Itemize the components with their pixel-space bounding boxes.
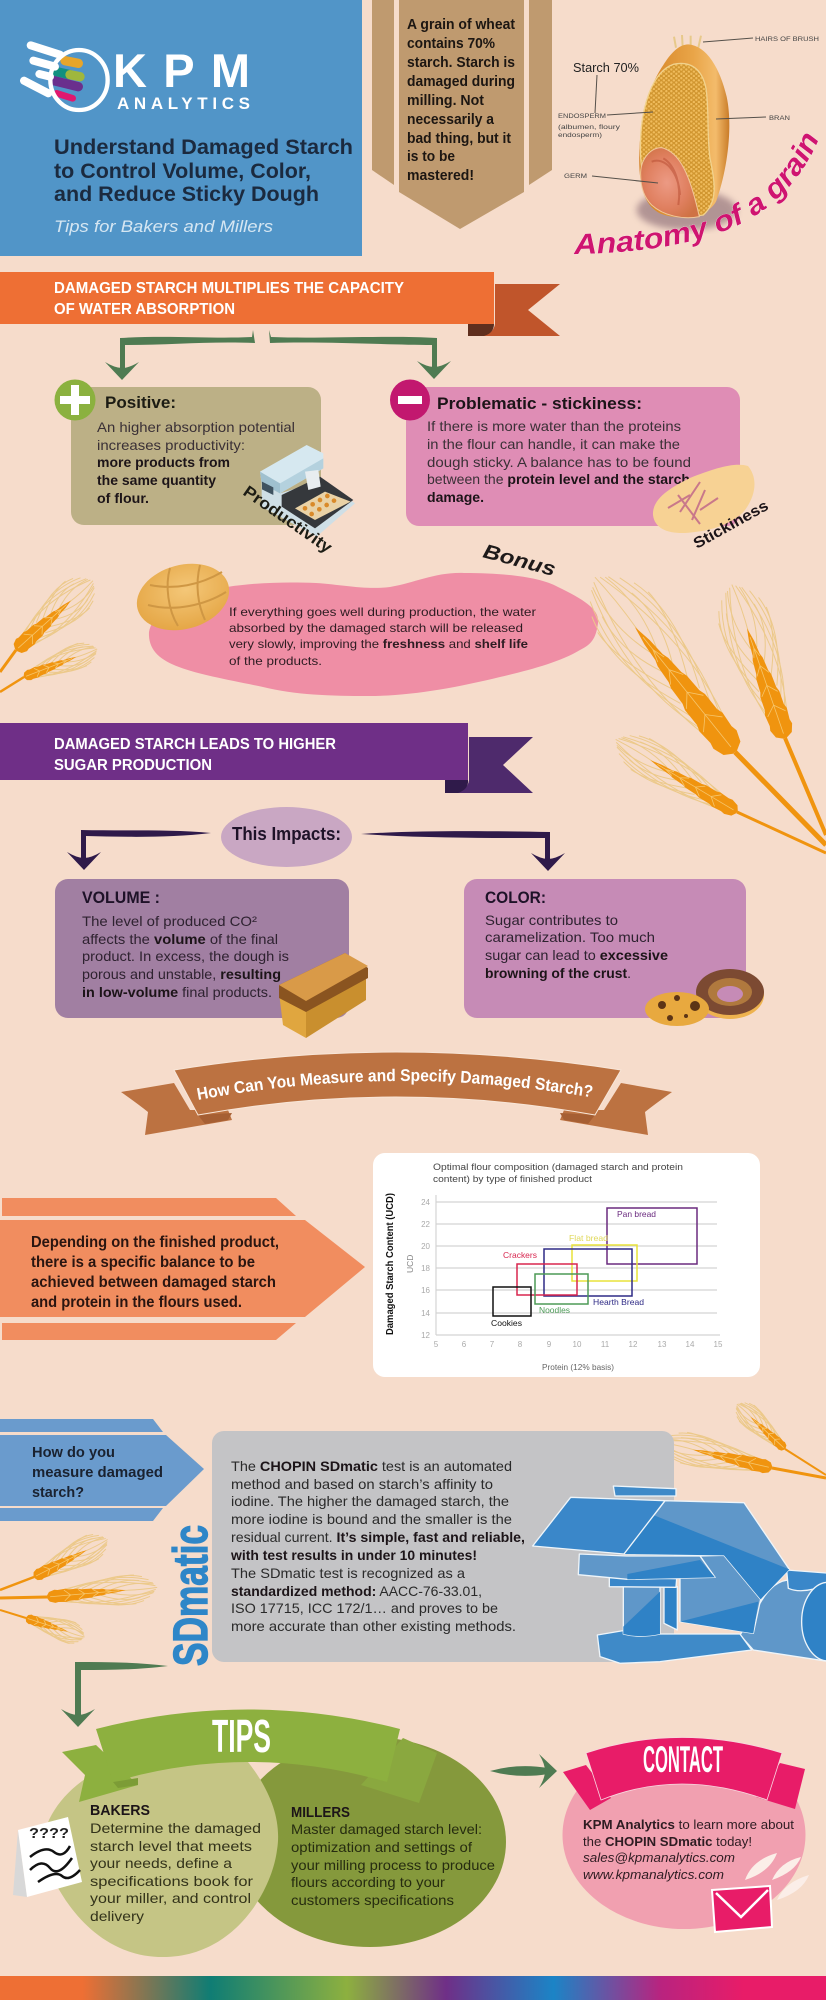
subtitle: Tips for Bakers and Millers bbox=[54, 218, 273, 236]
ribbon text: How Can You Measure and Specify Damaged Starch? bbox=[196, 1068, 592, 1100]
panel: volume bbox=[55, 879, 349, 1018]
arrow panel: specific balance bbox=[0, 1198, 365, 1340]
wheat: top right of SDmatic bbox=[658, 1396, 826, 1483]
title: and Reduce Sticky Dough bbox=[54, 183, 319, 206]
millers text: Master damaged starch level: bbox=[291, 1821, 482, 1837]
panel: SDmatic description: residual current. It’s simple, fast and reliable, bbox=[231, 1529, 525, 1545]
bakers text: starch level that meets bbox=[90, 1838, 252, 1854]
axis labels: Protein (12% basis) bbox=[542, 1362, 614, 1372]
grain labels: (albumen, floury bbox=[558, 124, 621, 131]
y axis ticks: 14 bbox=[421, 1309, 431, 1318]
contact text: sales@kpmanalytics.com bbox=[583, 1850, 735, 1865]
section banner: sugar production: SUGAR PRODUCTION bbox=[54, 757, 212, 774]
caption: anatomy of a grain: Anatomy of a grain bbox=[573, 133, 818, 254]
positive body text: An higher absorption potential bbox=[97, 419, 295, 435]
positive body text: the same quantity bbox=[97, 472, 216, 488]
problematic body text: in the flour can handle, it can make the bbox=[427, 436, 680, 452]
label: SDmatic vertical: SDmatic bbox=[165, 1525, 218, 1666]
wheat: left of SDmatic bbox=[0, 1528, 158, 1647]
volume body text: affects the volume of the final bbox=[82, 931, 278, 947]
positive body text bbox=[97, 419, 295, 506]
x axis ticks: 14 bbox=[686, 1340, 695, 1349]
bakers text bbox=[90, 1802, 261, 1924]
panel: SDmatic description: The CHOPIN SDmatic test is an automated bbox=[231, 1458, 512, 1474]
problematic body text: If there is more water than the proteins bbox=[427, 418, 681, 434]
ribbon: tips: TIPS bbox=[212, 1710, 271, 1762]
x axis ticks: 13 bbox=[658, 1340, 667, 1349]
bakers text: BAKERS bbox=[90, 1802, 150, 1819]
problematic body text: dough sticky. A balance has to be found bbox=[427, 454, 691, 470]
x axis ticks: 12 bbox=[629, 1340, 638, 1349]
icon: donut and cookie bbox=[645, 969, 764, 1026]
chart title bbox=[433, 1162, 683, 1184]
millers text bbox=[291, 1804, 495, 1908]
panel: contact bbox=[562, 1738, 809, 1932]
bonus text: If everything goes well during production, the water bbox=[229, 605, 536, 619]
diagram: anatomy of a grain bbox=[558, 35, 819, 254]
section banner: sugar production: DAMAGED STARCH LEADS TO HIGHER bbox=[54, 736, 336, 753]
panel: color: COLOR: bbox=[485, 889, 546, 907]
hanging ribbon: grain fact: milling. Not bbox=[407, 93, 484, 109]
bonus text: very slowly, improving the freshness and shelf life bbox=[229, 637, 528, 651]
hanging ribbon: grain fact: bad thing, but it bbox=[407, 131, 511, 147]
arrow: tips to contact bbox=[490, 1754, 557, 1788]
chart: flour composition bbox=[373, 1153, 760, 1377]
chart labels: Crackers bbox=[503, 1250, 537, 1260]
logo: KPM Analytics: ANALYTICS bbox=[117, 94, 250, 113]
hanging ribbon: grain fact: is to be bbox=[407, 149, 455, 165]
panel: tips bbox=[13, 1710, 506, 1957]
x axis ticks: 5 bbox=[434, 1340, 439, 1349]
callout: this impacts: This Impacts: bbox=[232, 824, 341, 844]
shape: bakers egg bbox=[43, 1757, 278, 1957]
arrow panel: how do you measure: starch? bbox=[32, 1484, 84, 1501]
chart title: Optimal flour composition (damaged starch and protein bbox=[433, 1162, 683, 1172]
icon: sticky dough bbox=[653, 465, 754, 533]
chart ranges bbox=[493, 1208, 697, 1316]
volume body text: in low-volume final products. bbox=[82, 984, 272, 1000]
x axis ticks: 9 bbox=[547, 1340, 552, 1349]
panel: problematic stickiness bbox=[390, 380, 740, 526]
hanging ribbon: grain fact: contains 70% bbox=[407, 36, 495, 52]
section banner: water absorption bbox=[0, 272, 560, 336]
rainbow footer bar bbox=[0, 1976, 826, 2000]
arrow panel: specific balance: Depending on the finished product, bbox=[31, 1234, 279, 1251]
x axis ticks bbox=[434, 1340, 723, 1349]
positive body text: increases productivity: bbox=[97, 437, 245, 453]
ribbon heading: how can you measure bbox=[121, 1052, 672, 1135]
y axis ticks: 18 bbox=[421, 1264, 431, 1273]
panel: problematic stickiness: Problematic - stickiness: bbox=[437, 394, 642, 413]
chart labels: Pan bread bbox=[617, 1209, 656, 1219]
grain labels: GERM bbox=[564, 173, 587, 180]
panel: SDmatic description: more accurate than other existing methods. bbox=[231, 1618, 516, 1634]
problematic body text bbox=[427, 418, 691, 505]
positive body text: more products from bbox=[97, 454, 230, 470]
axis labels: UCD bbox=[405, 1255, 415, 1273]
panel: SDmatic description: with test results in under 10 minutes! bbox=[230, 1547, 477, 1563]
bakers text: your miller, and control bbox=[90, 1890, 251, 1906]
arrow: to tips bbox=[61, 1662, 168, 1727]
y axis ticks: 16 bbox=[421, 1286, 431, 1295]
panel: SDmatic description: iodine. The higher the damaged starch, the bbox=[231, 1493, 509, 1509]
panel: volume: VOLUME : bbox=[82, 889, 160, 907]
panel: bonus bbox=[129, 541, 598, 696]
y axis ticks: 24 bbox=[421, 1198, 431, 1207]
millers text: customers specifications bbox=[291, 1892, 454, 1908]
panel: SDmatic description: more iodine is bound and the smaller is the bbox=[231, 1511, 512, 1527]
title: Understand Damaged Starch bbox=[54, 136, 353, 159]
section banner: sugar production bbox=[0, 723, 533, 793]
grain illustration bbox=[637, 35, 737, 230]
problematic body text: damage. bbox=[427, 489, 484, 505]
icon: note with question marks bbox=[13, 1817, 82, 1897]
millers text: optimization and settings of bbox=[291, 1839, 472, 1855]
panel: SDmatic description: method and based on starch’s affinity to bbox=[231, 1476, 493, 1492]
chart labels bbox=[491, 1209, 656, 1328]
arrow panel: specific balance: there is a specific balance to be bbox=[31, 1254, 255, 1271]
y axis ticks: 22 bbox=[421, 1220, 431, 1229]
panel: SDmatic description: standardized method: AACC-76-33.01, bbox=[231, 1583, 482, 1599]
icon: loaf of bread bbox=[279, 953, 368, 1038]
chart title: content) by type of finished product bbox=[433, 1174, 593, 1184]
title: to Control Volume, Color, bbox=[54, 160, 311, 183]
hanging ribbon: grain fact: starch. Starch is bbox=[407, 55, 515, 71]
panel: positive: Positive: bbox=[105, 394, 176, 412]
title bbox=[54, 136, 353, 206]
section banner: water absorption: OF WATER ABSORPTION bbox=[54, 301, 235, 318]
logo: KPM Analytics: KPM bbox=[113, 44, 250, 97]
millers text: MILLERS bbox=[291, 1804, 350, 1821]
panel: positive bbox=[54, 380, 321, 525]
chart labels: Hearth Bread bbox=[593, 1297, 644, 1307]
bakers text: specifications book for bbox=[90, 1873, 253, 1889]
panel: SDmatic description: ISO 17715, ICC 172/1… and proves to be bbox=[231, 1600, 498, 1616]
icon: minus bbox=[390, 380, 430, 420]
axis labels: Damaged Starch Content (UCD) bbox=[384, 1193, 396, 1335]
millers text: your milling process to produce bbox=[291, 1857, 495, 1873]
icon: bread bun bbox=[129, 554, 237, 640]
grain labels: Starch 70% bbox=[573, 60, 639, 75]
grain labels: BRAN bbox=[769, 115, 790, 122]
x axis ticks: 8 bbox=[518, 1340, 523, 1349]
hanging ribbon: grain fact: damaged during bbox=[407, 74, 515, 90]
color body text: Sugar contributes to bbox=[485, 912, 618, 928]
chart gridlines and axes bbox=[436, 1195, 720, 1335]
chart labels: Noodles bbox=[539, 1305, 570, 1315]
bonus text bbox=[229, 605, 536, 668]
contact text: the CHOPIN SDmatic today! bbox=[583, 1834, 752, 1849]
arrow panel: how do you measure: How do you bbox=[32, 1444, 115, 1461]
label: bonus: Bonus bbox=[481, 541, 558, 581]
hanging ribbon: grain fact: necessarily a bbox=[407, 112, 495, 128]
panel: SDmatic description: The SDmatic test is recognized as a bbox=[231, 1565, 465, 1581]
arrow panel: how do you measure bbox=[0, 1419, 204, 1521]
y axis ticks: 20 bbox=[421, 1242, 431, 1251]
icon: envelope bbox=[712, 1853, 809, 1932]
ribbon: tips bbox=[62, 1710, 437, 1803]
icon: production oven bbox=[260, 445, 355, 537]
contact text: www.kpmanalytics.com bbox=[583, 1867, 724, 1882]
arrow panel: specific balance: achieved between damaged starch bbox=[31, 1274, 276, 1291]
panel: color bbox=[464, 879, 746, 1018]
grain labels: HAIRS OF BRUSH bbox=[755, 36, 819, 43]
volume body text: The level of produced CO² bbox=[82, 913, 257, 929]
grain labels bbox=[558, 36, 819, 180]
problematic body text: between the protein level and the starch bbox=[427, 471, 690, 487]
x axis ticks: 15 bbox=[714, 1340, 723, 1349]
contact text bbox=[583, 1817, 794, 1882]
volume body text: porous and unstable, resulting bbox=[82, 966, 281, 982]
color body text: sugar can lead to excessive bbox=[485, 947, 668, 963]
color body text: caramelization. Too much bbox=[485, 929, 655, 945]
callout: this impacts bbox=[221, 807, 352, 867]
section banner: water absorption: DAMAGED STARCH MULTIPLIES THE CAPACITY bbox=[54, 280, 405, 297]
hanging ribbon: grain fact: A grain of wheat bbox=[407, 17, 515, 33]
arrows: impacts to volume and color bbox=[67, 830, 565, 871]
grain labels: endosperm) bbox=[558, 132, 602, 139]
grain labels: ENDOSPERM bbox=[558, 113, 606, 120]
x axis ticks: 10 bbox=[573, 1340, 582, 1349]
positive body text: of flour. bbox=[97, 490, 149, 506]
grain callout lines bbox=[592, 38, 766, 183]
bakers text: your needs, define a bbox=[90, 1855, 232, 1871]
illustration: SDmatic instrument bbox=[533, 1486, 826, 1663]
volume body text bbox=[82, 913, 289, 1000]
x axis ticks: 11 bbox=[601, 1340, 610, 1349]
x axis ticks: 7 bbox=[490, 1340, 495, 1349]
contact text: KPM Analytics to learn more about bbox=[583, 1817, 794, 1832]
label: productivity: Productivity bbox=[240, 483, 336, 557]
arrow panel: specific balance: and protein in the flours used. bbox=[31, 1294, 242, 1311]
bonus text: of the products. bbox=[229, 654, 322, 668]
volume body text: product. In excess, the dough is bbox=[82, 948, 289, 964]
bakers text: delivery bbox=[90, 1908, 144, 1924]
y axis ticks bbox=[421, 1198, 431, 1340]
ribbon: contact bbox=[563, 1738, 805, 1810]
hanging ribbon: grain fact: mastered! bbox=[407, 168, 474, 184]
icon: plus bbox=[54, 380, 96, 420]
bonus text: absorbed by the damaged starch will be released bbox=[229, 621, 523, 635]
wheat: left of bonus bbox=[0, 567, 105, 692]
icon: note with question marks: ???? bbox=[29, 1825, 69, 1842]
x axis ticks: 6 bbox=[462, 1340, 467, 1349]
color body text bbox=[485, 912, 668, 981]
arrow panel: how do you measure: measure damaged bbox=[32, 1464, 163, 1481]
chart labels: Flat bread bbox=[569, 1233, 608, 1243]
y axis ticks: 12 bbox=[421, 1331, 431, 1340]
wheat: right large bbox=[569, 557, 826, 853]
panel: SDmatic description bbox=[212, 1431, 674, 1662]
arrows: split to positive and problematic bbox=[105, 330, 451, 380]
color body text: browning of the crust. bbox=[485, 965, 631, 981]
chart labels: Cookies bbox=[491, 1318, 522, 1328]
shape: millers circle bbox=[234, 1737, 506, 1947]
hanging ribbon: grain fact bbox=[372, 0, 552, 229]
millers text: flours according to your bbox=[291, 1874, 445, 1890]
header panel bbox=[0, 0, 362, 256]
logo: KPM Analytics bbox=[24, 44, 250, 113]
bakers text: Determine the damaged bbox=[90, 1820, 261, 1836]
label: stickiness: Stickiness bbox=[691, 497, 772, 552]
axis labels bbox=[384, 1193, 614, 1372]
ribbon: contact: CONTACT bbox=[643, 1739, 723, 1780]
